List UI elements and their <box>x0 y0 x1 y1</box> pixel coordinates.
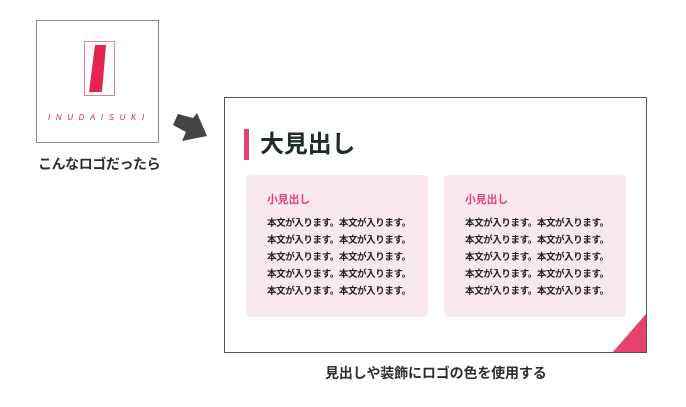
body text: 本文が入ります。本文が入ります。 <box>465 269 609 280</box>
panel: left card <box>246 175 428 317</box>
panel: slide <box>224 97 647 353</box>
panel: logo box <box>36 20 159 143</box>
body text: 本文が入ります。本文が入ります。 <box>267 269 411 280</box>
body text: 本文が入ります。本文が入ります。 <box>267 218 411 229</box>
icon: arrow <box>173 113 207 141</box>
panel: right card <box>444 175 626 317</box>
icon: corner triangle <box>613 314 646 352</box>
body text: 本文が入ります。本文が入ります。 <box>465 286 609 297</box>
body text <box>465 217 609 297</box>
heading: 大見出し <box>260 131 355 158</box>
body text: 本文が入ります。本文が入ります。 <box>465 235 609 246</box>
heading accent bar <box>244 129 249 160</box>
caption: logo: こんなロゴだったら <box>38 156 160 172</box>
subheading: 小見出し <box>267 194 310 206</box>
body text: 本文が入ります。本文が入ります。 <box>267 235 411 246</box>
body text: 本文が入ります。本文が入ります。 <box>267 286 411 297</box>
logo wordmark: INUDAISUKI <box>48 113 150 122</box>
body text: 本文が入ります。本文が入ります。 <box>465 218 609 229</box>
icon: logo mark <box>84 41 115 96</box>
caption: slide: 見出しや装飾にロゴの色を使用する <box>325 365 547 381</box>
body text <box>267 217 411 297</box>
body text: 本文が入ります。本文が入ります。 <box>465 252 609 263</box>
subheading: 小見出し <box>465 194 508 206</box>
body text: 本文が入ります。本文が入ります。 <box>267 252 411 263</box>
